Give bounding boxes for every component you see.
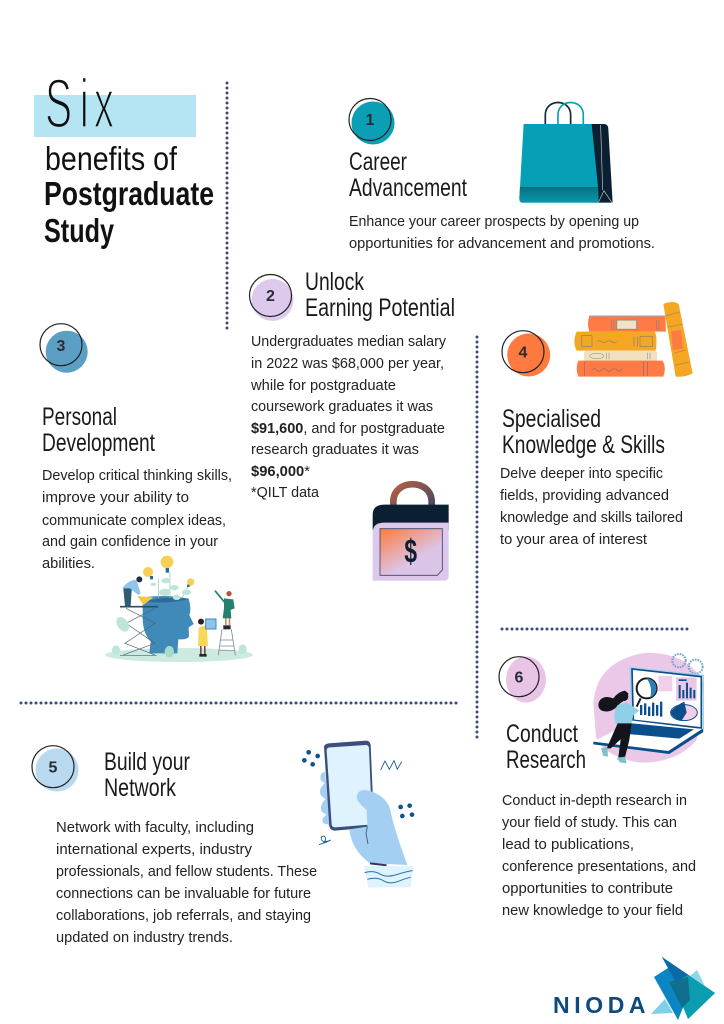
heading: conduct research: Research — [506, 746, 586, 774]
text: build your network: international experts, industry — [56, 842, 253, 858]
heading: unlock earning potential — [305, 268, 455, 322]
panel: personal development — [40, 324, 253, 662]
heading: conduct research: Conduct — [506, 720, 578, 748]
text: conduct research: conference presentations, and — [502, 859, 696, 875]
number badge 2 — [250, 274, 294, 321]
heading: career advancement: Career — [349, 148, 407, 176]
number badge 4: 4 — [519, 344, 528, 362]
number badge 5 — [32, 746, 78, 792]
text: earning potential: $96,000* — [251, 464, 310, 480]
text: personal development: communicate complex ideas, — [42, 513, 226, 529]
heading: specialised knowledge and skills: Knowledge & Skills — [502, 431, 665, 459]
text: conduct research: lead to publications, — [502, 837, 634, 853]
panel: career advancement — [349, 98, 655, 252]
text: earning potential: *QILT data — [251, 485, 320, 501]
text: conduct research: your field of study. This can — [502, 815, 677, 831]
icon: hand holding phone — [302, 741, 414, 887]
heading: personal development: Personal — [42, 403, 117, 431]
text: build your network: connections can be invaluable for future — [56, 886, 311, 902]
number badge 6: 6 — [515, 670, 524, 686]
text: personal development: Develop critical thinking skills, — [42, 468, 232, 484]
title: Postgraduate — [44, 175, 214, 212]
heading: build your network: Network — [104, 774, 176, 802]
illustration: head with growing ideas — [105, 556, 253, 662]
heading: build your network: Build your — [104, 748, 190, 776]
text: earning potential: in 2022 was $68,000 per year, — [251, 356, 444, 372]
text: specialised knowledge: Delve deeper into specific — [500, 466, 663, 482]
number badge 5: 5 — [49, 760, 58, 776]
icon: salary bag — [373, 484, 449, 581]
icon: salary bag: $ — [404, 534, 417, 571]
text: earning potential: while for postgraduate — [250, 378, 396, 394]
number badge 2: 2 — [266, 288, 275, 305]
heading: build your network — [104, 748, 190, 802]
number badge 3 — [40, 324, 88, 373]
heading: career advancement — [349, 148, 467, 202]
text: conduct research: Conduct in-depth research in — [502, 793, 687, 809]
icon: stack of books — [574, 302, 693, 377]
number badge 3: 3 — [57, 338, 66, 355]
heading: unlock earning potential: Unlock — [305, 268, 364, 296]
text: earning potential: $91,600, and for postgraduate — [251, 421, 445, 437]
text: career advancement — [349, 214, 655, 252]
panel: earning potential — [250, 268, 455, 581]
text: earning potential — [250, 334, 447, 501]
icon: shopping bag — [519, 102, 613, 203]
heading: career advancement: Advancement — [349, 174, 467, 202]
panel: build your network — [32, 741, 414, 946]
text: conduct research: opportunities to contribute — [502, 881, 673, 897]
text: earning potential: coursework graduates it was — [251, 399, 433, 415]
number badge 1 — [349, 98, 394, 144]
number badge 6 — [499, 656, 546, 702]
text: build your network: Network with faculty, including — [56, 820, 254, 836]
panel: specialised knowledge — [500, 302, 693, 548]
title: Study — [44, 212, 114, 249]
title: benefits of — [45, 140, 178, 177]
heading: specialised knowledge and skills: Specialised — [502, 405, 601, 433]
heading: personal development: Development — [42, 429, 155, 457]
text: specialised knowledge: knowledge and skills tailored — [500, 510, 683, 526]
text: build your network: collaborations, job referrals, and staying — [56, 908, 311, 924]
text: personal development: abilities. — [42, 556, 95, 572]
number badge 4 — [502, 331, 550, 376]
logo: NIODA: NIODA — [553, 992, 650, 1018]
heading: unlock earning potential: Earning Potential — [305, 294, 455, 322]
text: personal development: improve your ability to — [42, 490, 189, 506]
text: specialised knowledge: to your area of interest — [500, 532, 647, 548]
text: earning potential: research graduates it was — [251, 442, 419, 458]
heading: specialised knowledge and skills — [502, 405, 665, 459]
text: personal development — [42, 468, 232, 572]
heading: personal development — [42, 403, 155, 457]
text: career advancement: Enhance your career prospects by opening up — [349, 214, 639, 230]
title: Six — [45, 65, 114, 143]
text: conduct research: new knowledge to your field — [502, 903, 683, 919]
text: build your network: professionals, and fellow students. These — [56, 864, 317, 880]
text: build your network: updated on industry trends. — [56, 930, 233, 946]
illustration: researcher with laptop — [593, 653, 703, 763]
number badge 1: 1 — [366, 112, 375, 129]
heading: conduct research — [506, 720, 586, 774]
text: build your network — [56, 820, 317, 946]
text: career advancement: opportunities for advancement and promotions. — [349, 236, 655, 252]
text: specialised knowledge: fields, providing advanced — [500, 488, 669, 504]
panel: conduct research — [499, 653, 703, 919]
text: earning potential: Undergraduates median salary — [251, 334, 447, 350]
text: conduct research — [502, 793, 696, 919]
text: personal development: and gain confidence in your — [42, 534, 218, 550]
logo: NIODA — [553, 957, 715, 1020]
title — [34, 65, 214, 249]
text: specialised knowledge — [500, 466, 683, 548]
